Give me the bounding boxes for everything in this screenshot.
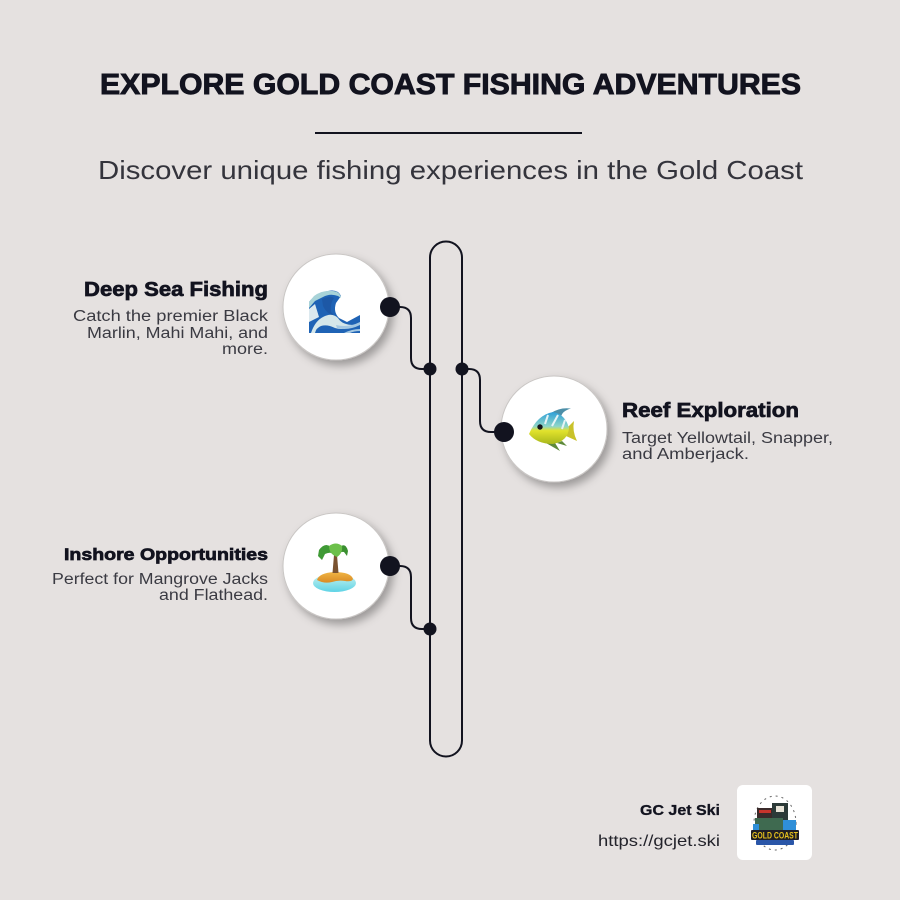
central timeline pill — [430, 242, 462, 756]
panel: deep sea fishing — [73, 254, 436, 376]
brand logo: GOLD COAST — [752, 830, 798, 840]
node: inshore opportunities — [380, 556, 400, 576]
subtitle: Discover unique fishing experiences in the Gold Coast — [98, 155, 804, 185]
description: inshore opportunities: Perfect for Mangrove Jacks — [52, 571, 268, 588]
brand url: https://gcjet.ski — [598, 833, 720, 850]
node: deep sea fishing — [380, 297, 400, 317]
connector: inshore opportunities — [390, 566, 430, 629]
icon: tropical fish — [529, 408, 577, 451]
description: deep sea fishing: Catch the premier Black — [73, 308, 268, 325]
icon: ocean wave — [309, 291, 360, 333]
description: reef exploration: Target Yellowtail, Snapper, — [622, 430, 833, 447]
connector: deep sea fishing — [390, 307, 430, 369]
brand logo — [737, 785, 812, 860]
junction: reef exploration — [456, 362, 468, 376]
description: reef exploration — [622, 430, 833, 463]
description: inshore opportunities — [52, 571, 268, 604]
icon circle: wave — [283, 254, 389, 360]
heading: reef exploration: Reef Exploration — [622, 400, 799, 422]
heading: inshore opportunities: Inshore Opportunities — [64, 545, 268, 564]
node: reef exploration — [494, 422, 514, 442]
brand name: GC Jet Ski — [640, 803, 720, 819]
junction: deep sea fishing — [424, 362, 436, 376]
icon circle: island — [283, 513, 389, 619]
connector: reef exploration — [462, 369, 504, 432]
heading: deep sea fishing: Deep Sea Fishing — [84, 279, 268, 301]
description: inshore opportunities: and Flathead. — [159, 587, 268, 604]
description: deep sea fishing — [73, 308, 268, 358]
description: deep sea fishing: Marlin, Mahi Mahi, and — [87, 325, 268, 342]
icon circle: fish — [501, 376, 607, 482]
description: deep sea fishing: more. — [222, 341, 268, 358]
junction: inshore opportunities — [424, 622, 436, 636]
panel: reef exploration — [456, 362, 833, 482]
title rule — [315, 132, 582, 134]
title: EXPLORE GOLD COAST FISHING ADVENTURES — [100, 69, 801, 101]
description: reef exploration: and Amberjack. — [622, 446, 749, 463]
panel: inshore opportunities — [52, 513, 436, 636]
icon: desert island — [313, 544, 356, 592]
